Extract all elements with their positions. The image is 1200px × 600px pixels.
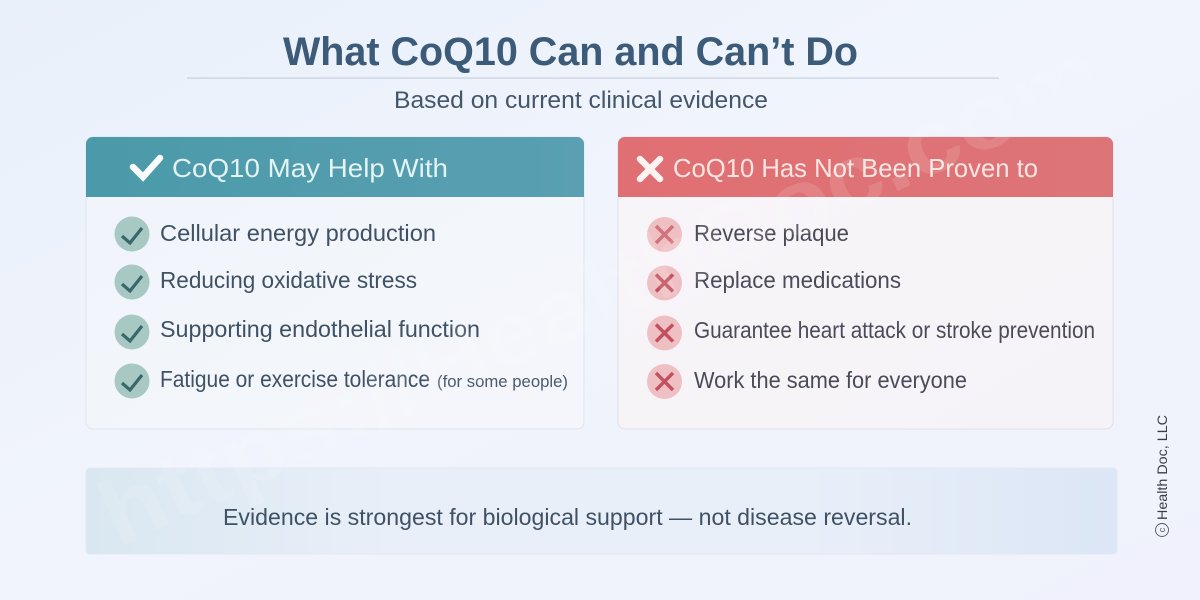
header text: CoQ10 May Help With — [172, 153, 448, 183]
row: fatigue: (for some people) — [437, 372, 568, 391]
panel: not proven — [618, 137, 1113, 429]
panel header: not proven — [618, 137, 1113, 197]
row: guarantee — [647, 316, 1095, 350]
row: endothelial function — [114, 314, 480, 350]
title rule — [187, 78, 999, 79]
copyright: c — [1157, 527, 1167, 532]
row: replace medications: Replace medications — [694, 267, 901, 293]
row: guarantee: Guarantee heart attack or stroke prevention — [694, 317, 1095, 343]
watermark: https://HealthDoc.com — [84, 20, 1117, 566]
row: oxidative stress — [114, 264, 417, 300]
row: replace medications — [647, 266, 901, 300]
subtitle: Based on current clinical evidence — [394, 87, 768, 114]
row: fatigue: Fatigue or exercise tolerance — [160, 366, 430, 392]
row: fatigue — [114, 364, 568, 398]
header text: CoQ10 Has Not Been Proven to — [673, 153, 1038, 183]
row: cellular energy: Cellular energy production — [160, 220, 436, 246]
row: endothelial function: Supporting endothelial function — [160, 316, 480, 342]
title: What CoQ10 Can and Can’t Do — [283, 30, 858, 74]
copyright: Health Doc, LLC — [1154, 415, 1170, 520]
row: reverse plaque: Reverse plaque — [694, 220, 849, 246]
callout: evidence summary: Evidence is strongest for biological support — not disease reversal. — [223, 504, 912, 530]
row: reverse plaque — [647, 217, 849, 252]
panel header: may help — [86, 137, 584, 197]
row: work the same — [647, 364, 967, 399]
row: cellular energy — [114, 216, 436, 252]
icon: white check — [133, 158, 160, 177]
callout: evidence summary — [86, 468, 1117, 554]
panel: may help — [86, 137, 584, 429]
row: oxidative stress: Reducing oxidative stress — [160, 267, 417, 293]
icon: white cross — [640, 159, 660, 179]
row: work the same: Work the same for everyone — [694, 367, 967, 393]
